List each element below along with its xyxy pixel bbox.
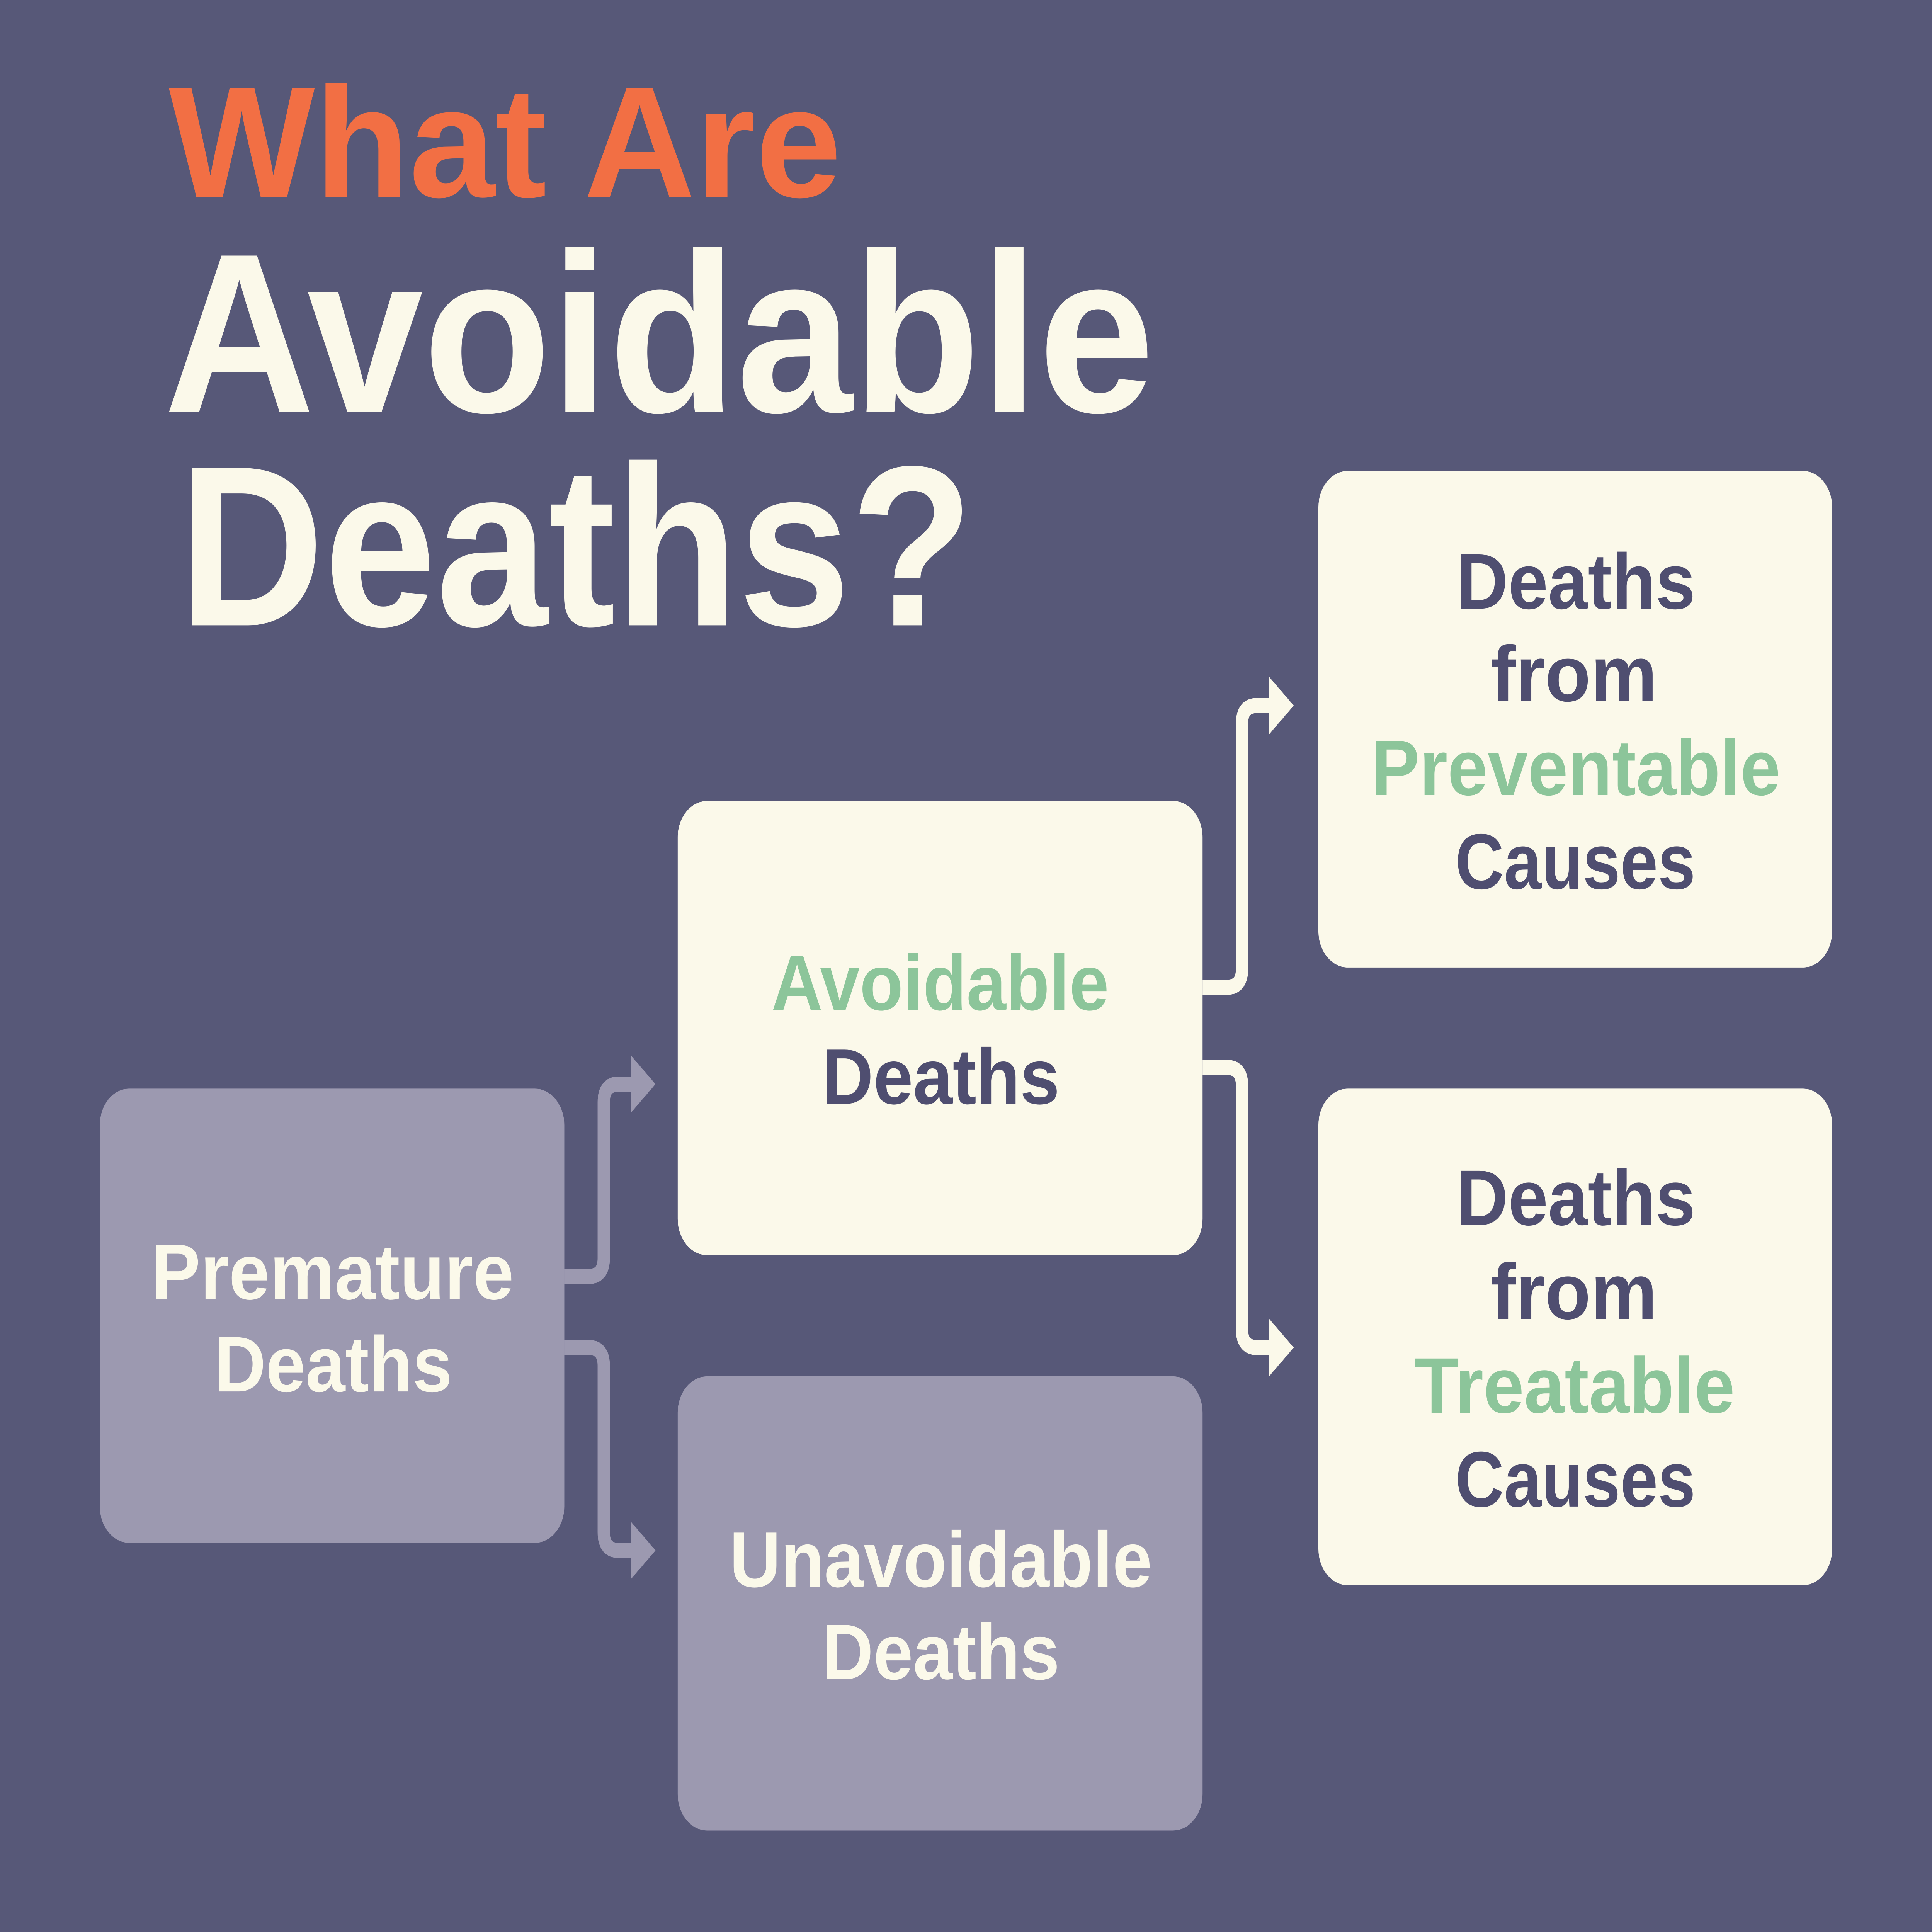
panel: preventable causes: Preventable — [1371, 724, 1781, 812]
panel: preventable causes: Causes — [1455, 818, 1696, 906]
panel: preventable causes: from — [1491, 630, 1657, 718]
arrow: premature to avoidable — [564, 1055, 655, 1276]
panel: premature deaths — [100, 1088, 564, 1543]
panel: preventable causes — [1318, 471, 1832, 968]
arrow: avoidable to treatable — [1202, 1068, 1294, 1376]
panel: treatable causes: Deaths — [1456, 1154, 1696, 1242]
panel: avoidable deaths: Deaths — [822, 1033, 1060, 1121]
title: Deaths? — [179, 419, 973, 674]
panel: treatable causes: Treatable — [1415, 1342, 1735, 1430]
title: Avoidable — [164, 206, 1155, 460]
panel: avoidable deaths — [678, 801, 1202, 1255]
panel: treatable causes: from — [1491, 1248, 1657, 1336]
panel: premature deaths: Deaths — [214, 1321, 452, 1408]
panel: unavoidable deaths: Deaths — [822, 1608, 1060, 1696]
panel: unavoidable deaths — [678, 1376, 1202, 1830]
arrow: avoidable to preventable — [1202, 677, 1294, 987]
title: What Are — [169, 54, 842, 230]
panel: treatable causes — [1318, 1088, 1832, 1585]
panel: preventable causes: Deaths — [1456, 538, 1696, 626]
arrow: premature to unavoidable — [564, 1347, 655, 1579]
panel: premature deaths: Premature — [151, 1228, 514, 1316]
panel: unavoidable deaths: Unavoidable — [730, 1516, 1152, 1604]
panel: treatable causes: Causes — [1455, 1436, 1696, 1524]
panel: avoidable deaths: Avoidable — [771, 939, 1109, 1027]
title — [164, 54, 1155, 674]
